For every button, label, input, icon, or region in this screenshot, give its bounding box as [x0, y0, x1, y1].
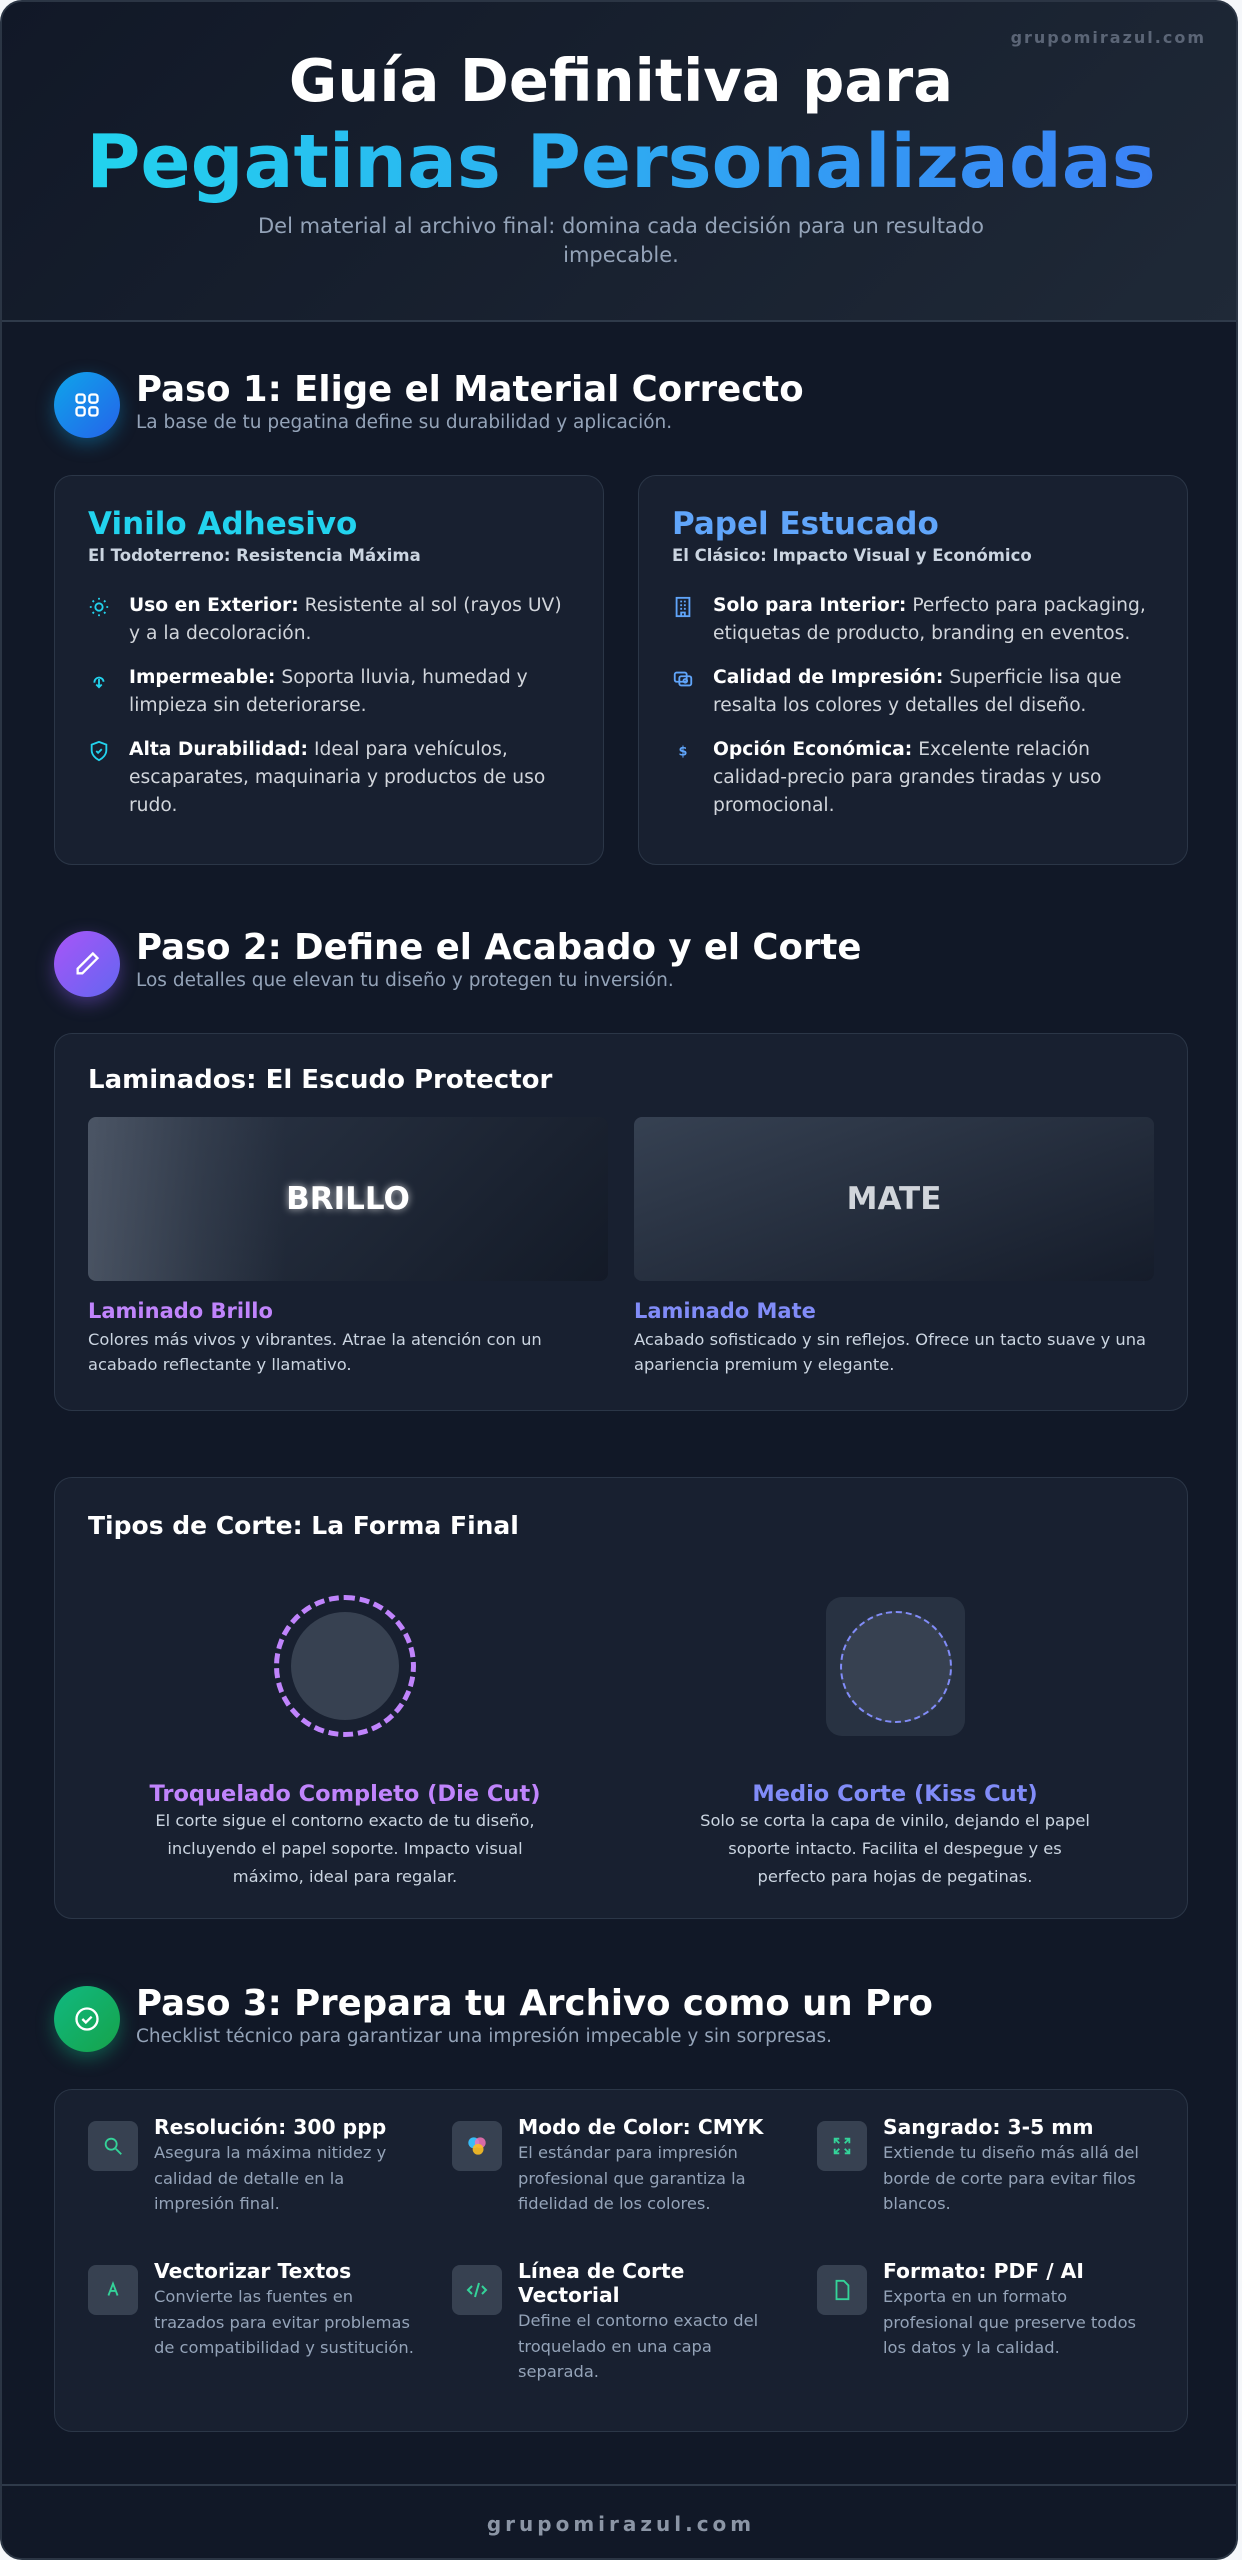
title: Pegatinas Personalizadas	[86, 119, 1156, 205]
icon: check	[54, 1986, 120, 2052]
panel: checklist: Sangrado: 3-5 mm	[883, 2115, 1094, 2139]
step 3 heading: Checklist técnico para garantizar una impresión impecable y sin sorpresas.	[136, 2026, 832, 2047]
icon: pencil	[54, 931, 120, 997]
step 1 heading: Paso 1: Elige el Material Correcto	[136, 369, 804, 410]
item: durabilidad: Alta Durabilidad: Ideal para vehículos, escaparates, maquinaria y productos de uso rudo.	[129, 739, 545, 816]
text: mate: Acabado sofisticado y sin reflejos. Ofrece un tacto suave y una apariencia premium y elegante.	[634, 1330, 1146, 1374]
text: brillo: Laminado Brillo	[88, 1299, 273, 1323]
step 1 heading	[45, 369, 804, 453]
header	[2, 2, 1240, 322]
icon: grid	[54, 372, 120, 438]
item: sangrado	[817, 2115, 1139, 2213]
step 2 heading	[44, 927, 861, 1013]
step 3 heading	[46, 1983, 933, 2066]
panel: checklist: Convierte las fuentes en trazados para evitar problemas de compatibilidad y sustitución.	[154, 2287, 414, 2357]
panel: vinilo: El Todoterreno: Resistencia Máxima	[88, 546, 421, 565]
panel: checklist: Exporta en un formato profesional que preserve todos los datos y la calidad.	[883, 2287, 1136, 2357]
panel: tipos de corte: Tipos de Corte: La Forma Final	[88, 1511, 519, 1540]
panel: checklist: Vectorizar Textos	[154, 2259, 351, 2283]
title	[86, 46, 1156, 205]
item: interior: Solo para Interior: Perfecto para packaging, etiquetas de producto, branding en eventos.	[713, 595, 1146, 644]
panel: checklist: El estándar para impresión profesional que garantiza la fidelidad de los colores.	[518, 2143, 746, 2213]
item: vectorizar	[88, 2259, 414, 2357]
text: mate	[634, 1299, 1146, 1374]
panel: laminados: Laminados: El Escudo Protector	[88, 1065, 552, 1095]
panel: checklist: Define el contorno exacto del troquelado en una capa separada.	[518, 2311, 758, 2381]
panel: tipos de corte	[54, 1477, 1188, 1919]
swatch: mate: MATE	[847, 1181, 941, 1217]
step 2 heading: Paso 2: Define el Acabado y el Corte	[136, 927, 861, 968]
icon: die cut	[274, 1595, 416, 1737]
item: resolucion	[88, 2115, 386, 2213]
panel: laminados	[54, 1033, 1188, 1411]
text: brillo	[88, 1299, 542, 1374]
icon: kiss cut	[826, 1597, 965, 1736]
item: economica: Opción Económica: Excelente relación calidad-precio para grandes tiradas y uso promocional.	[713, 739, 1101, 816]
item: impermeable: Impermeable: Soporta lluvia, humedad y limpieza sin deteriorarse.	[129, 667, 528, 716]
subtitle: Del material al archivo final: domina cada decisión para un resultado impecable.	[258, 214, 984, 267]
footer: grupomirazul.com	[487, 2512, 755, 2536]
text: brillo: Colores más vivos y vibrantes. Atrae la atención con un acabado reflectante y llamativo.	[88, 1330, 542, 1374]
step 3 heading: Paso 3: Prepara tu Archivo como un Pro	[136, 1983, 933, 2024]
panel: papel: Papel Estucado	[672, 506, 939, 542]
panel: checklist: Resolución: 300 ppp	[154, 2115, 386, 2139]
item: cmyk	[452, 2115, 764, 2213]
title: Guía Definitiva para	[289, 46, 953, 115]
item: calidad: Calidad de Impresión: Superficie lisa que resalta los colores y detalles del diseño.	[713, 667, 1122, 716]
footer	[2, 2484, 1240, 2560]
text: kiss cut: Solo se corta la capa de vinilo, dejando el papel soporte intacto. Facilita el despegue y es perfecto para hojas de pegatinas.	[700, 1811, 1090, 1886]
panel: vinilo: Vinilo Adhesivo	[88, 506, 357, 542]
step 1 heading: La base de tu pegatina define su durabilidad y aplicación.	[136, 412, 672, 433]
item: formato	[817, 2259, 1136, 2357]
text: die cut	[150, 1781, 540, 1886]
item: economica: $	[679, 745, 688, 760]
text: kiss cut: Medio Corte (Kiss Cut)	[752, 1781, 1038, 1807]
panel: checklist	[54, 2089, 1188, 2432]
panel: papel	[638, 475, 1188, 865]
panel: checklist: Línea de Corte Vectorial	[518, 2259, 684, 2307]
text: die cut: El corte sigue el contorno exacto de tu diseño, incluyendo el papel soporte. Impacto visual máximo, ideal para regalar.	[155, 1811, 535, 1886]
panel: checklist: Modo de Color: CMYK	[518, 2115, 763, 2139]
panel: checklist: Extiende tu diseño más allá del borde de corte para evitar filos blancos.	[883, 2143, 1139, 2213]
item: exterior: Uso en Exterior: Resistente al sol (rayos UV) y a la decoloración.	[129, 595, 562, 644]
panel: papel: El Clásico: Impacto Visual y Económico	[672, 546, 1032, 565]
panel: checklist: Formato: PDF / AI	[883, 2259, 1084, 2283]
panel: checklist: Asegura la máxima nitidez y calidad de detalle en la impresión final.	[154, 2143, 386, 2213]
item: linea de corte	[452, 2259, 758, 2381]
text: mate: Laminado Mate	[634, 1299, 816, 1323]
panel: vinilo	[54, 475, 604, 865]
swatch: brillo: BRILLO	[286, 1181, 410, 1217]
text: die cut: Troquelado Completo (Die Cut)	[150, 1781, 540, 1807]
brand top right: grupomirazul.com	[1011, 28, 1206, 47]
swatch: mate	[634, 1117, 1154, 1281]
swatch: brillo	[88, 1117, 608, 1281]
step 2 heading: Los detalles que elevan tu diseño y protegen tu inversión.	[136, 970, 674, 991]
